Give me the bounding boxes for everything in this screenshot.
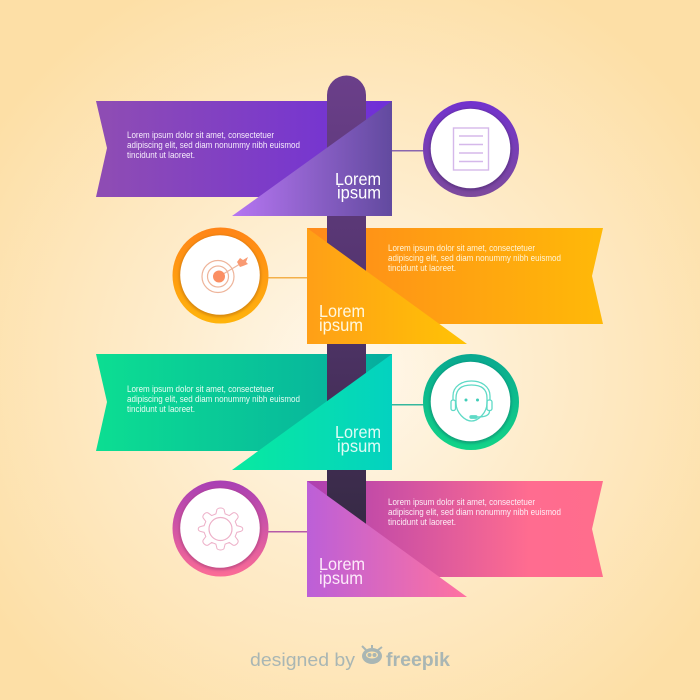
panel: step 4 label triangle	[307, 481, 467, 597]
text: step 4 description: adipiscing elit, sed diam nonummy nibh euismod	[388, 507, 561, 517]
text: step 1 description: Lorem ipsum dolor sit amet, consectetuer	[127, 130, 274, 140]
heading: step 2: Lorem	[319, 301, 365, 321]
heading: step 4: Lorem	[319, 554, 365, 574]
text: step 1 description: adipiscing elit, sed diam nonummy nibh euismod	[127, 140, 300, 150]
icon: target in orange circle	[172, 228, 268, 324]
heading: step 2	[319, 301, 365, 335]
connector: step 4	[268, 531, 307, 532]
text: step 4 description: Lorem ipsum dolor sit amet, consectetuer	[388, 497, 535, 507]
text: step 2 description: Lorem ipsum dolor sit amet, consectetuer	[388, 243, 535, 253]
heading: step 2: ipsum	[319, 315, 363, 335]
heading: step 1: ipsum	[337, 182, 381, 202]
text: step 3 description	[127, 384, 300, 414]
panel: step 2 ribbon	[307, 228, 603, 324]
text: step 4 description	[388, 497, 561, 527]
heading: step 1: Lorem	[335, 169, 381, 189]
text: step 1 description	[127, 130, 300, 160]
footer: designed by freepik: designed by	[250, 650, 355, 670]
panel: step 3 ribbon	[96, 354, 392, 451]
heading: step 4: ipsum	[319, 568, 363, 588]
text: step 1 description: tincidunt ut laoreet.	[127, 150, 195, 160]
icon: gear in pink circle	[172, 480, 268, 576]
signpost pole	[327, 76, 366, 525]
heading: step 3	[335, 422, 381, 456]
footer: designed by freepik	[250, 645, 450, 671]
heading: step 4	[319, 554, 365, 588]
heading: step 3: Lorem	[335, 422, 381, 442]
icon: freepik mascot	[362, 645, 382, 664]
panel: step 4 ribbon	[307, 481, 603, 577]
text: step 3 description: Lorem ipsum dolor sit amet, consectetuer	[127, 384, 274, 394]
text: step 4 description: tincidunt ut laoreet.	[388, 517, 456, 527]
connector: step 2	[268, 277, 307, 278]
panel: step 1 ribbon	[96, 101, 392, 197]
icon: document in purple circle	[423, 101, 519, 197]
text: step 2 description: tincidunt ut laoreet.	[388, 263, 456, 273]
connector: step 1	[392, 150, 424, 152]
footer: designed by freepik: freepik	[386, 650, 450, 671]
panel: step 1 label triangle	[232, 101, 392, 216]
heading: step 1	[335, 169, 381, 202]
text: step 3 description: tincidunt ut laoreet.	[127, 404, 195, 414]
text: step 2 description	[388, 243, 561, 273]
panel: step 3 label triangle	[232, 354, 392, 470]
icon: headset agent in green circle	[423, 354, 519, 450]
text: step 2 description: adipiscing elit, sed diam nonummy nibh euismod	[388, 253, 561, 263]
panel: step 2 label triangle	[307, 228, 467, 344]
text: step 3 description: adipiscing elit, sed diam nonummy nibh euismod	[127, 394, 300, 404]
connector: step 3	[392, 404, 424, 406]
heading: step 3: ipsum	[337, 436, 381, 456]
